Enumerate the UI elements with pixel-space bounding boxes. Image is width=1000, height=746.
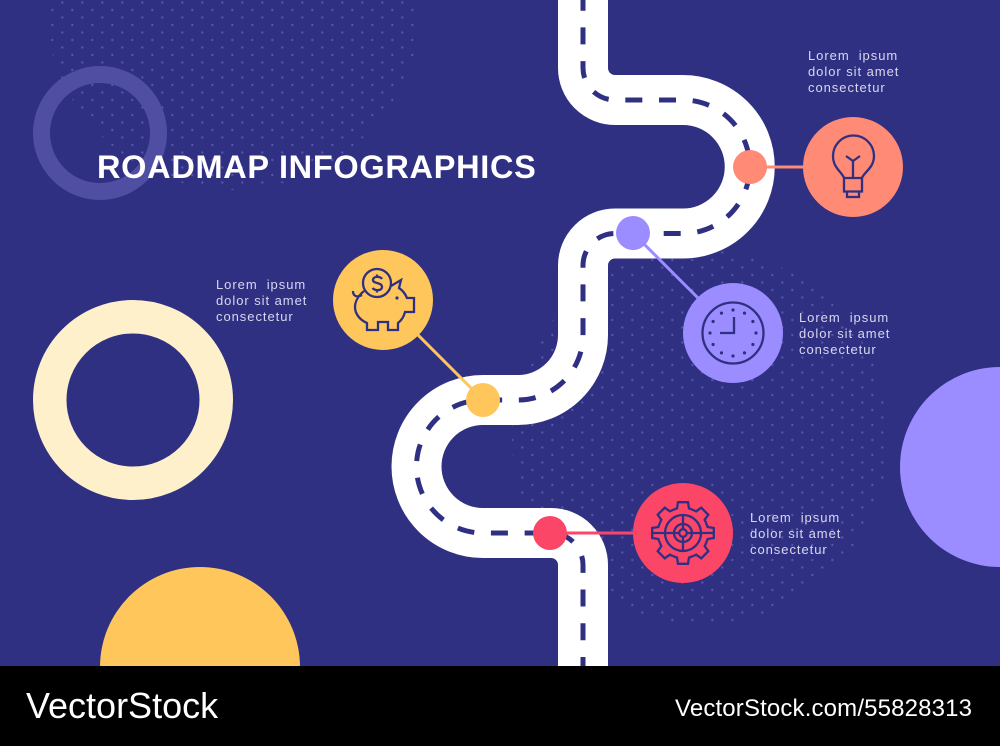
decorative circle: yellow xyxy=(100,567,300,746)
text block: middle right: Lorem ipsum dolor sit amet consectetur xyxy=(799,310,890,357)
connector: purple xyxy=(633,233,733,333)
icon: gear xyxy=(633,483,733,583)
connector: pink xyxy=(550,532,683,534)
icon: piggy bank xyxy=(333,250,433,350)
icon: clock xyxy=(683,283,783,383)
road node: purple xyxy=(616,216,650,250)
road node: yellow xyxy=(466,383,500,417)
road node: pink xyxy=(533,516,567,550)
brand name: VectorStock xyxy=(26,685,218,726)
connector: coral xyxy=(750,166,853,168)
dot pattern: top left xyxy=(45,0,421,190)
dot pattern: lower right xyxy=(512,249,888,625)
icon: light bulb xyxy=(803,117,903,217)
connector: yellow xyxy=(383,300,483,400)
winding road xyxy=(416,0,750,670)
title: ROADMAP INFOGRAPHICS xyxy=(97,149,537,185)
text block: top right: Lorem ipsum dolor sit amet consectetur xyxy=(808,48,899,95)
road node: coral xyxy=(733,150,767,184)
watermark bar xyxy=(0,666,1000,746)
decorative ring: cream xyxy=(50,317,216,483)
decorative ring: top left xyxy=(42,74,158,192)
image id: VectorStock.com/55828313 xyxy=(675,695,972,722)
text block: left: Lorem ipsum dolor sit amet consectetur xyxy=(216,277,307,324)
decorative circle: purple xyxy=(900,367,1000,567)
text block: lower right: Lorem ipsum dolor sit amet consectetur xyxy=(750,510,841,557)
pig eye xyxy=(395,296,399,300)
